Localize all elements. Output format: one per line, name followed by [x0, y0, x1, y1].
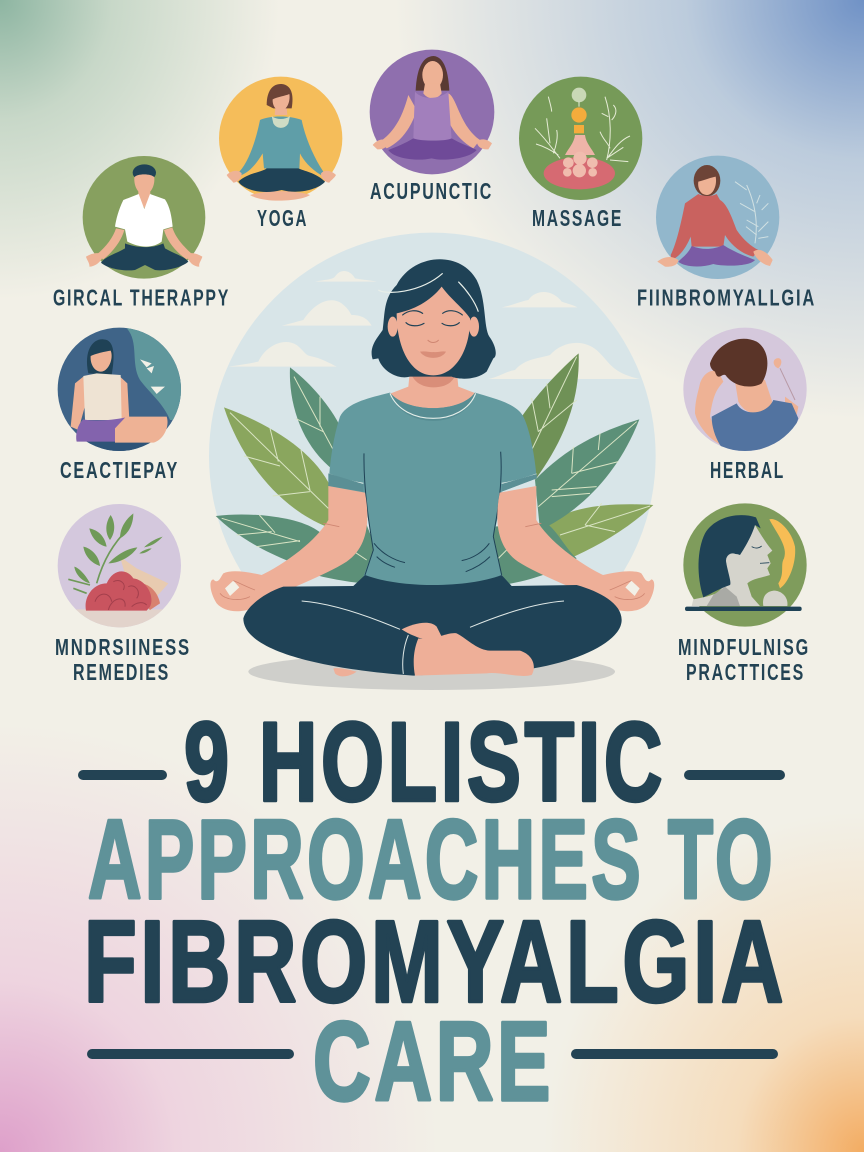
panel: girical therapy — [53, 156, 230, 310]
illustration: herbs and stones — [519, 77, 642, 200]
panel: yoga — [219, 77, 342, 231]
label line two: REMEDIES — [73, 659, 170, 685]
illustration: man meditating — [83, 156, 205, 279]
label: GIRCAL THERAPPY — [53, 284, 230, 310]
title line: 9 holistic: 9 HOLISTIC — [184, 700, 666, 824]
panel: herbal — [683, 328, 807, 483]
illustration: back of a head — [683, 328, 807, 460]
illustration: brain with herbs — [53, 504, 187, 630]
neck — [387, 370, 480, 433]
illustration: seated woman — [58, 327, 187, 453]
clouds — [228, 271, 640, 379]
panel: acupunctic — [370, 50, 494, 204]
panel: ceactiepay — [58, 327, 187, 483]
label: YOGA — [257, 205, 308, 231]
back hair — [372, 259, 496, 379]
label: MNDRSIINESS — [55, 634, 191, 660]
arms and hands — [210, 486, 654, 611]
panel: mindfulnisg practtices — [678, 503, 810, 685]
illustration: woman in red sweater — [656, 156, 779, 279]
label: HERBAL — [710, 457, 785, 483]
face — [397, 287, 470, 375]
collar band — [389, 393, 476, 421]
panel: mindrsiiness remedies — [53, 504, 191, 685]
panel: massage — [519, 77, 642, 231]
eyes, brows, nose, mouth — [403, 311, 462, 326]
sleeves shade — [328, 473, 537, 492]
label: ACUPUNCTIC — [370, 178, 493, 204]
label: CEACTIEPAY — [60, 457, 179, 483]
leaves — [216, 353, 653, 584]
label line two: PRACTTICES — [686, 659, 805, 685]
ears — [388, 317, 398, 337]
illustration: side profile — [683, 503, 807, 627]
fringe highlights — [378, 273, 478, 312]
title line: care: CARE — [313, 999, 554, 1124]
t-shirt — [328, 393, 537, 585]
illustration: woman in purple — [370, 50, 494, 174]
feet — [333, 623, 534, 676]
panel: fiinbromyallgia — [637, 156, 816, 310]
crossed legs — [243, 575, 622, 676]
label: MASSAGE — [532, 205, 623, 231]
label: MINDFULNISG — [678, 634, 810, 660]
floor shadow — [248, 653, 615, 690]
central meditating figure — [209, 233, 656, 690]
illustration: woman in teal sweater — [219, 77, 342, 201]
title — [84, 700, 787, 1124]
